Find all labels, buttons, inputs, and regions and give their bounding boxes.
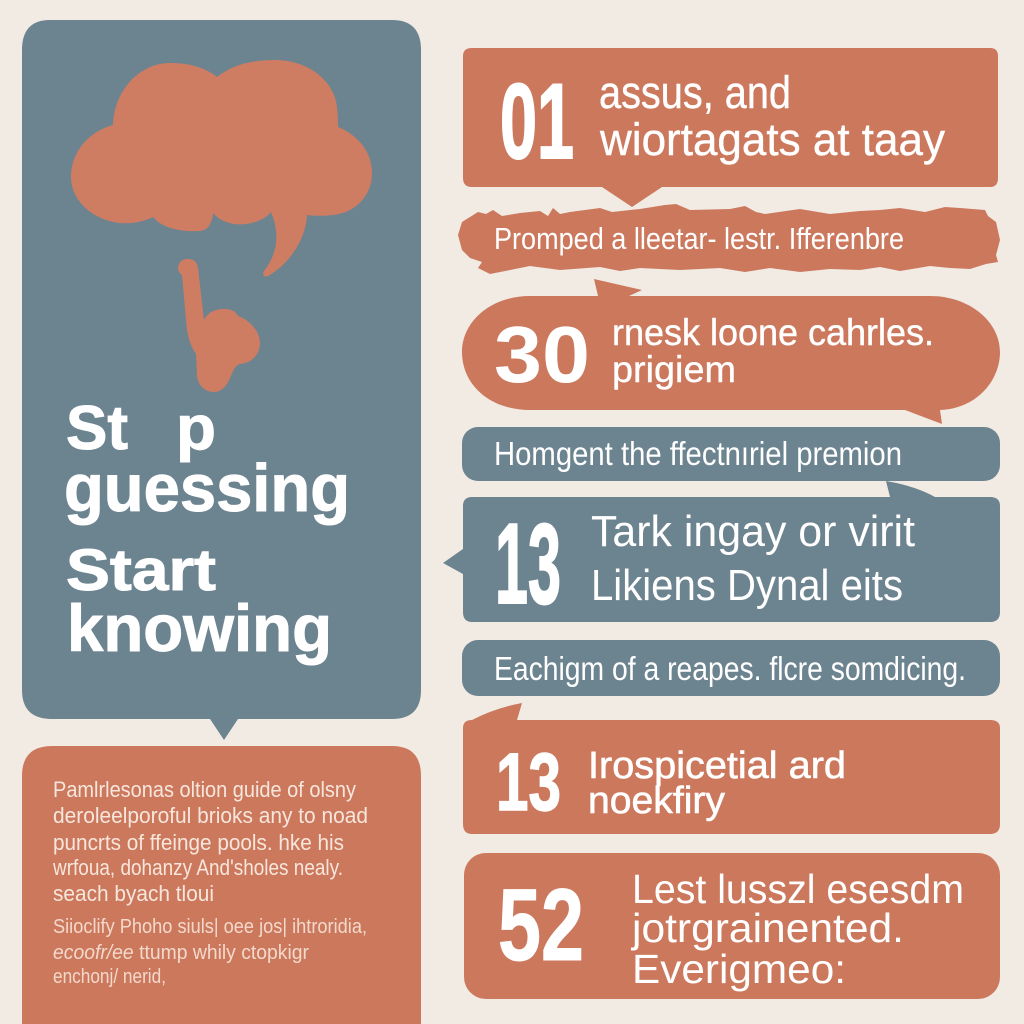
- card text: [612, 312, 934, 390]
- card: 52: [464, 853, 1000, 999]
- card text: Likiens Dynal eits: [591, 561, 903, 610]
- heading: p: [176, 394, 216, 463]
- banner text: Promped a lleetar- lestr. Ifferenbre: [494, 221, 904, 256]
- panel: left terracotta description: [22, 746, 421, 1024]
- card text: wiortagats at taay: [599, 114, 945, 165]
- card text: Irospicetial ard: [588, 745, 846, 787]
- card text: noekfiry: [588, 780, 725, 822]
- banner: blue one: [462, 427, 1000, 481]
- number: 52: [498, 868, 584, 982]
- banner text: Homgent the ffectnıriel premion: [494, 435, 902, 472]
- card text: rnesk loone cahrles.: [612, 312, 934, 353]
- banner: blue two: [462, 640, 1000, 696]
- text block: description: seach byach tloui: [53, 881, 214, 906]
- banner: torn strip: [458, 204, 1000, 274]
- heading: Start: [66, 538, 216, 603]
- card text: prigiem: [612, 349, 736, 390]
- card text: Everigmeo:: [632, 946, 846, 992]
- card text: Lest lusszl esesdm: [632, 866, 964, 912]
- card: 01: [463, 48, 998, 207]
- number: 13: [496, 737, 561, 828]
- number: 30: [494, 310, 590, 399]
- card text: Tark ingay or virit: [591, 507, 915, 556]
- panel: left blue hero: [22, 20, 421, 740]
- card text: assus, and: [599, 67, 791, 118]
- card: 13 blue: [443, 481, 1000, 628]
- text block: description note: ecoofr/ee ttump whily ctopkigr: [53, 942, 309, 964]
- number: 13: [495, 501, 561, 628]
- card text: [588, 745, 846, 822]
- heading: knowing: [67, 591, 332, 665]
- icon: cloud speech bubble: [71, 60, 372, 277]
- text block: description note: Siioclify Phoho siuls| oee jos| ihtroridia,: [53, 916, 367, 938]
- card text: [591, 507, 915, 610]
- heading: [64, 394, 350, 665]
- card text: [599, 67, 945, 165]
- text block: description: deroleelporoful brioks any to noad: [53, 803, 368, 828]
- text block: description note: enchonj/ nerid,: [53, 966, 166, 988]
- text block: description: [52, 777, 368, 906]
- text block: description: Pamlrlesonas oltion guide of olsny: [53, 777, 356, 802]
- card text: jotrgrainented.: [631, 905, 904, 951]
- card: 13 terracotta: [463, 703, 1000, 834]
- heading: guessing: [64, 451, 350, 526]
- card text: [631, 866, 964, 992]
- text block: description: puncrts of ffeinge pools. hke his: [53, 830, 344, 855]
- text block: description: wrfoua, dohanzy And'sholes nealy.: [52, 855, 343, 880]
- text block: description note: [53, 916, 367, 988]
- icon: pointing hand: [178, 259, 260, 392]
- heading: St: [66, 394, 128, 463]
- number: 01: [500, 61, 574, 181]
- card: 30: [462, 279, 1000, 424]
